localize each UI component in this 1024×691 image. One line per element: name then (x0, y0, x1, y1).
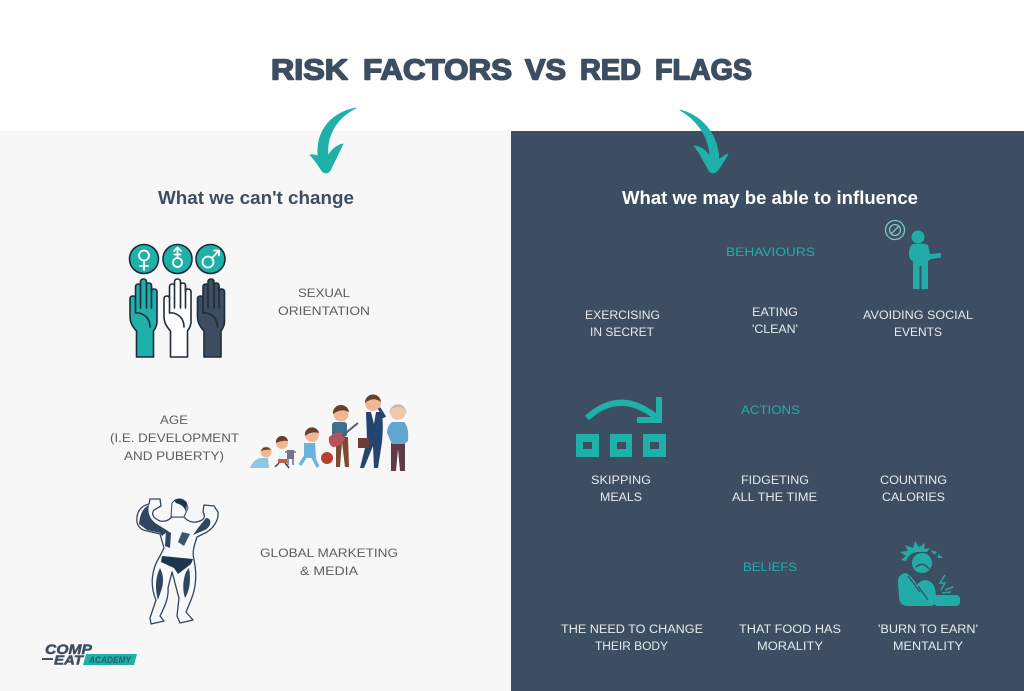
text: burn to earn mentality: 'BURN TO EARN' (878, 622, 978, 636)
text: the need to change their body: THE NEED TO CHANGE (561, 622, 703, 636)
label: global marketing and media: GLOBAL MARKETING (260, 546, 398, 560)
panel: what we can't change (0, 131, 511, 691)
panel: what we may be able to influence (511, 131, 1024, 691)
heading: what we may be able to influence: What we may be able to influence (622, 187, 918, 208)
text: that food has morality: MORALITY (757, 639, 823, 653)
adult in suit with briefcase (358, 394, 384, 468)
logo: comp-eat academy: COMP (45, 641, 93, 657)
title: RED (580, 54, 641, 86)
label: age (110, 413, 239, 463)
text: the need to change their body (561, 622, 703, 653)
text: exercising in secret (585, 308, 660, 339)
logo: comp-eat academy: ACADEMY (88, 655, 132, 665)
text: exercising in secret: EXERCISING (585, 308, 660, 322)
text: eating clean: 'CLEAN' (752, 322, 798, 336)
baby crawling (250, 446, 272, 468)
label: age: AGE (160, 413, 188, 427)
arrow: right panel (680, 110, 728, 173)
text: burn to earn mentality (878, 622, 978, 653)
label: age: AND PUBERTY) (124, 449, 224, 463)
text: avoiding social events: AVOIDING SOCIAL (863, 308, 973, 322)
label: global marketing and media (260, 546, 398, 578)
text: eating clean: EATING (752, 305, 798, 319)
teen with guitar (329, 405, 358, 467)
label: global marketing and media: & MEDIA (300, 564, 359, 578)
text: skipping meals: SKIPPING (591, 473, 651, 487)
text: skipping meals: MEALS (600, 490, 642, 504)
text: counting calories: CALORIES (882, 490, 945, 504)
text: skipping meals (591, 473, 651, 504)
elderly person (387, 404, 408, 471)
icon: skip arrow over three squares (576, 397, 666, 457)
section label: behaviours: BEHAVIOURS (726, 245, 815, 259)
label: sexual orientation (278, 286, 370, 318)
text: fidgeting all the time: ALL THE TIME (732, 490, 817, 504)
logo: comp-eat academy: EAT (54, 652, 84, 668)
icon: flexing bodybuilder (137, 499, 218, 624)
icon: people at different ages (250, 394, 408, 471)
text: burn to earn mentality: MENTALITY (893, 639, 963, 653)
text: counting calories (880, 473, 947, 504)
text: avoiding social events: EVENTS (894, 325, 942, 339)
arrow: left panel (310, 108, 356, 173)
title: FACTORS (363, 54, 512, 86)
text: fidgeting all the time (732, 473, 817, 504)
text: counting calories: COUNTING (880, 473, 947, 487)
label: sexual orientation: SEXUAL (298, 286, 350, 300)
heading: what we can't change: What we can't change (158, 187, 354, 208)
icon: person in pain (898, 541, 960, 606)
section label: actions: ACTIONS (741, 403, 800, 417)
label: sexual orientation: ORIENTATION (278, 304, 370, 318)
toddler with robot (275, 436, 296, 468)
icon: person avoiding social events (886, 220, 941, 289)
text: the need to change their body: THEIR BODY (595, 639, 668, 653)
text: that food has morality: THAT FOOD HAS (739, 622, 841, 636)
text: fidgeting all the time: FIDGETING (741, 473, 809, 487)
logo: comp-eat academy (42, 641, 137, 668)
text: eating clean (752, 305, 798, 336)
title: FLAGS (655, 54, 752, 86)
text: that food has morality (739, 622, 841, 653)
text: exercising in secret: IN SECRET (590, 325, 654, 339)
child with ball (300, 427, 333, 467)
title: VS (525, 54, 566, 86)
icon: gender symbols and raised hands (130, 244, 225, 357)
title: RISK (271, 54, 348, 86)
label: age: (I.E. DEVELOPMENT (110, 431, 239, 445)
title (271, 54, 752, 86)
section label: beliefs: BELIEFS (743, 560, 797, 574)
text: avoiding social events (863, 308, 973, 339)
